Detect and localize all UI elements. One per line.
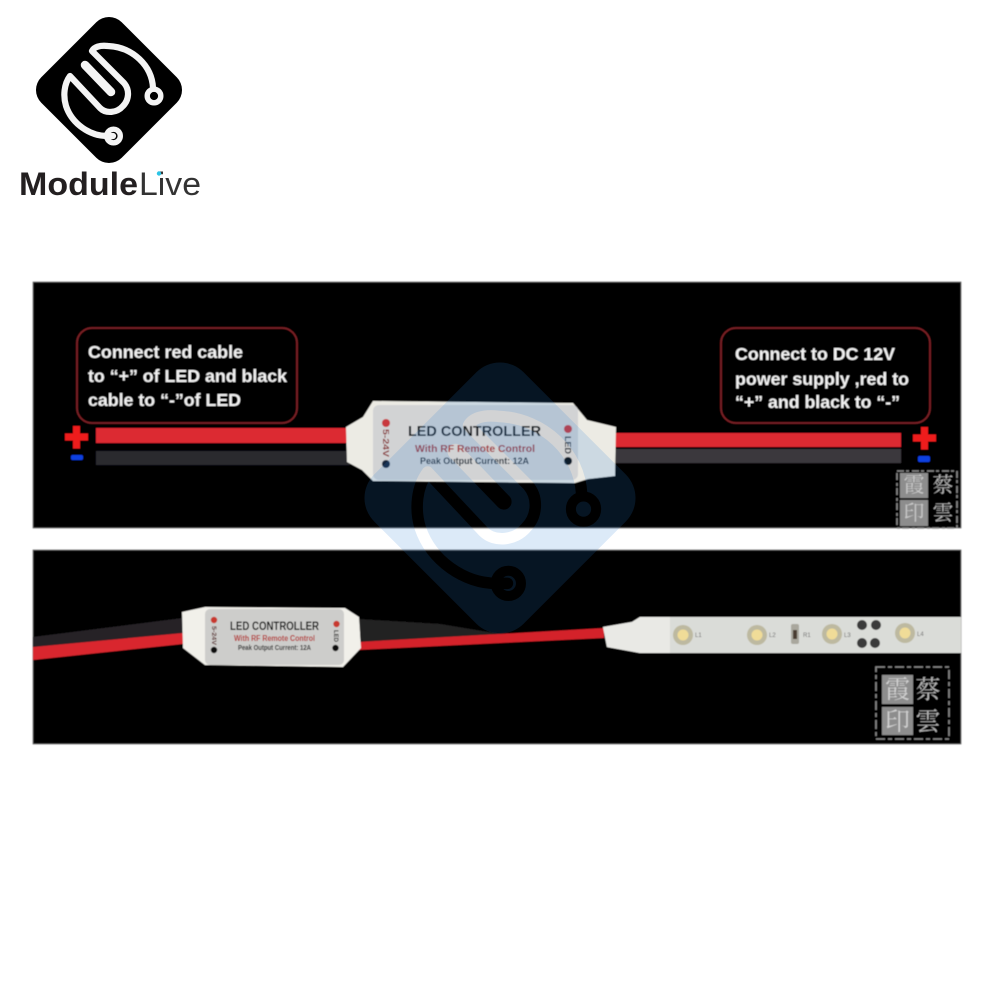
- LED controller module: With RF Remote Control: [234, 634, 315, 643]
- right cables: [612, 433, 901, 463]
- seal stamp: [897, 469, 957, 528]
- LED controller module: Peak Output Current: 12A: [420, 456, 529, 467]
- LED controller module: 5-24V: [381, 429, 391, 457]
- logo wordmark: [19, 166, 201, 202]
- LED controller module: LED: [332, 630, 339, 642]
- resistor: [791, 624, 799, 644]
- seal stamp: 霞: [904, 469, 924, 499]
- strip labels: [695, 632, 924, 639]
- right polarity marks: [913, 427, 936, 462]
- LED controller module: Peak Output Current: 12A: [238, 645, 311, 652]
- callout: LED connection: Connect red cable: [88, 342, 243, 362]
- seal stamp: 印: [885, 702, 910, 738]
- LED controller module: With RF Remote Control: [415, 443, 535, 455]
- solder pads: [857, 620, 881, 648]
- logo icon: circuit diamond: [29, 10, 189, 170]
- watermark: translucent blue logo: [364, 362, 636, 634]
- LED controller module: LED: [563, 436, 573, 454]
- callout: power supply: “+” and black to “-”: [735, 392, 900, 412]
- left polarity marks: [65, 426, 88, 460]
- seal stamp: 霞: [885, 670, 910, 706]
- callout: LED connection: cable to “-”of LED: [88, 390, 241, 410]
- seal stamp: 蔡: [915, 670, 941, 706]
- strip labels: L4: [917, 632, 924, 638]
- seal stamp: 蔡: [932, 469, 954, 499]
- LED controller module: [346, 401, 616, 483]
- callout: power supply: Connect to DC 12V: [735, 344, 895, 364]
- strip labels: R1: [803, 633, 811, 639]
- left cables: [96, 428, 350, 465]
- seal stamp: 雲: [932, 497, 954, 527]
- seal stamp: 印: [904, 497, 924, 527]
- callout: power supply: [721, 328, 930, 423]
- callout: power supply: power supply ,red to: [735, 369, 909, 389]
- strip labels: L2: [769, 633, 776, 639]
- LED strip: [603, 617, 961, 653]
- brand logo: [19, 10, 201, 202]
- seal stamp: 雲: [915, 702, 941, 738]
- left cables: [33, 618, 183, 660]
- callout: LED connection: [77, 328, 297, 423]
- LED chips: [673, 623, 915, 645]
- seal stamp: [876, 667, 949, 739]
- callout: LED connection: to “+” of LED and black: [88, 366, 287, 386]
- panel: wiring diagram: [33, 282, 961, 528]
- panel: controller with LED strip: [33, 550, 961, 744]
- strip labels: L3: [844, 633, 851, 639]
- strip labels: L1: [695, 633, 702, 639]
- right cables: [358, 619, 604, 650]
- LED controller module: [182, 607, 361, 667]
- LED controller module: 5-24V: [210, 626, 217, 646]
- LED controller module: LED CONTROLLER: [408, 423, 541, 440]
- logo wordmark: Live: [139, 166, 201, 202]
- LED controller module: LED CONTROLLER: [230, 621, 320, 633]
- logo wordmark: Module: [19, 166, 138, 202]
